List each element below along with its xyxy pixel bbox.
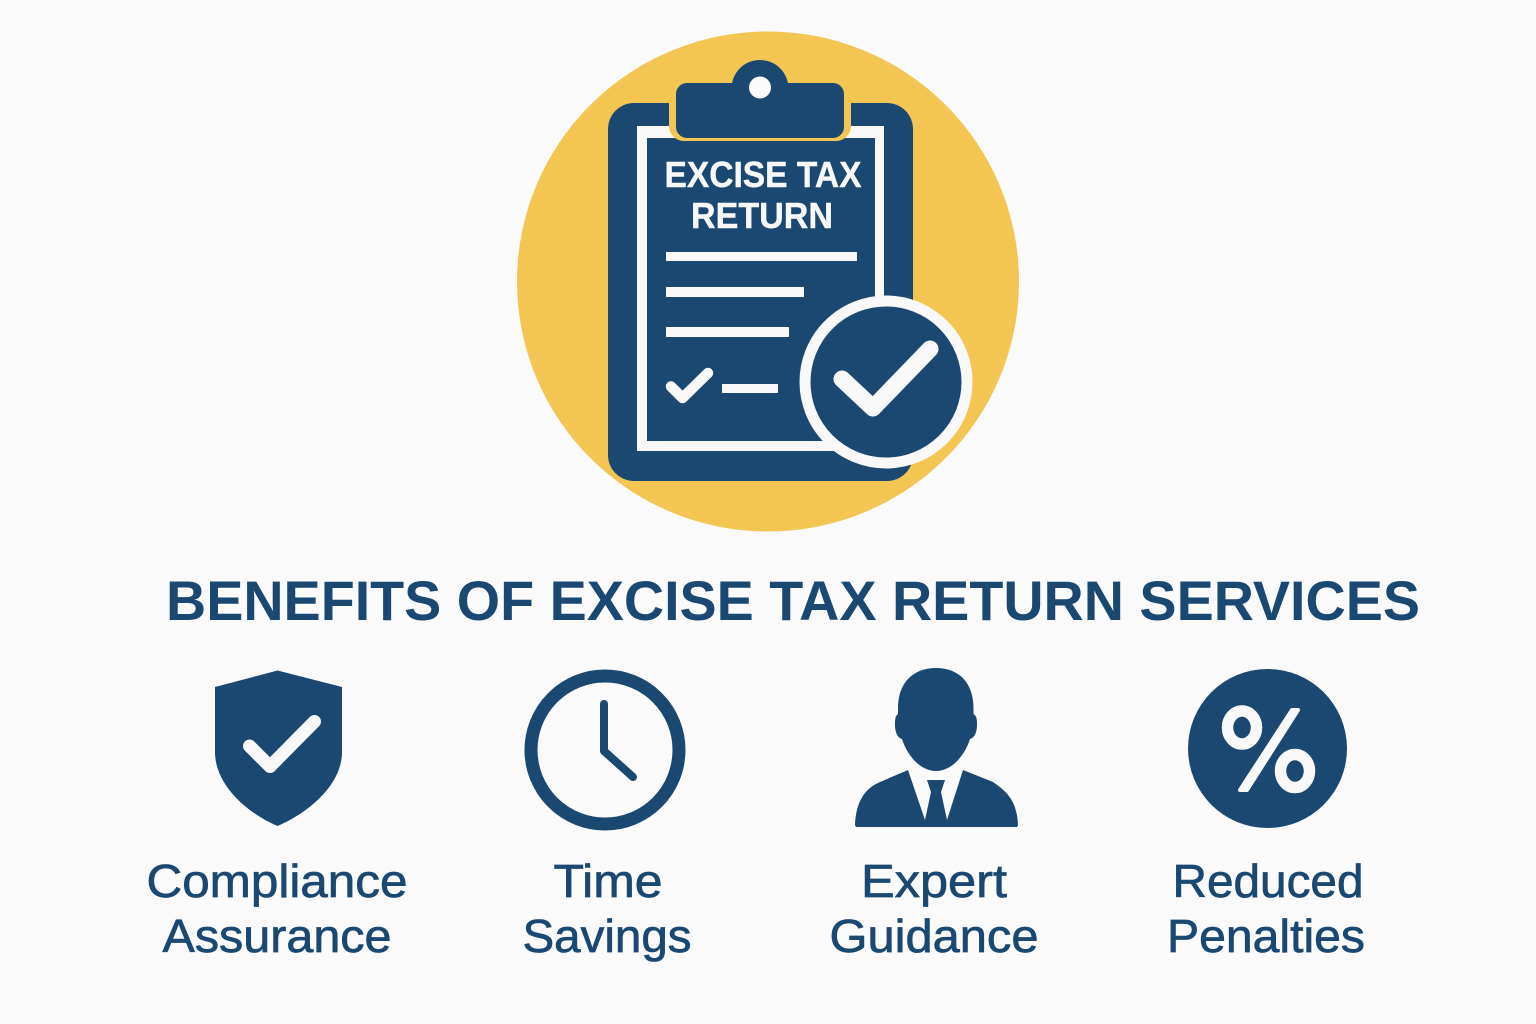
- clip: [669, 60, 851, 141]
- heading: BENEFITS OF EXCISE TAX RETURN SERVICES: [166, 569, 1420, 632]
- label: expert guidance: Guidance: [830, 910, 1038, 962]
- icon: shield check: [215, 670, 342, 826]
- label: compliance assurance: Assurance: [162, 910, 392, 962]
- label: time savings: Savings: [522, 910, 692, 962]
- suit and tie: [855, 770, 1018, 827]
- label: compliance assurance: Compliance: [146, 855, 408, 907]
- icon: round check badge: [805, 301, 967, 463]
- label: reduced penalties: Reduced: [1172, 855, 1364, 907]
- yellow circle background: [517, 32, 1019, 532]
- icon: expert person: [855, 668, 1018, 827]
- icon: clipboard: [608, 60, 913, 481]
- clipboard board: [608, 103, 913, 481]
- small check: [671, 373, 708, 398]
- clipboard title: EXCISE TAX: [664, 154, 862, 195]
- paper outline: [637, 126, 884, 451]
- icon: clock: [531, 676, 679, 824]
- label: expert guidance: Expert: [861, 855, 1007, 907]
- head: [895, 668, 977, 771]
- form lines: [666, 252, 857, 393]
- clipboard title: RETURN: [691, 195, 833, 236]
- label: time savings: Time: [554, 855, 662, 907]
- label: reduced penalties: Penalties: [1167, 910, 1365, 962]
- icon: percent badge: [1188, 669, 1347, 828]
